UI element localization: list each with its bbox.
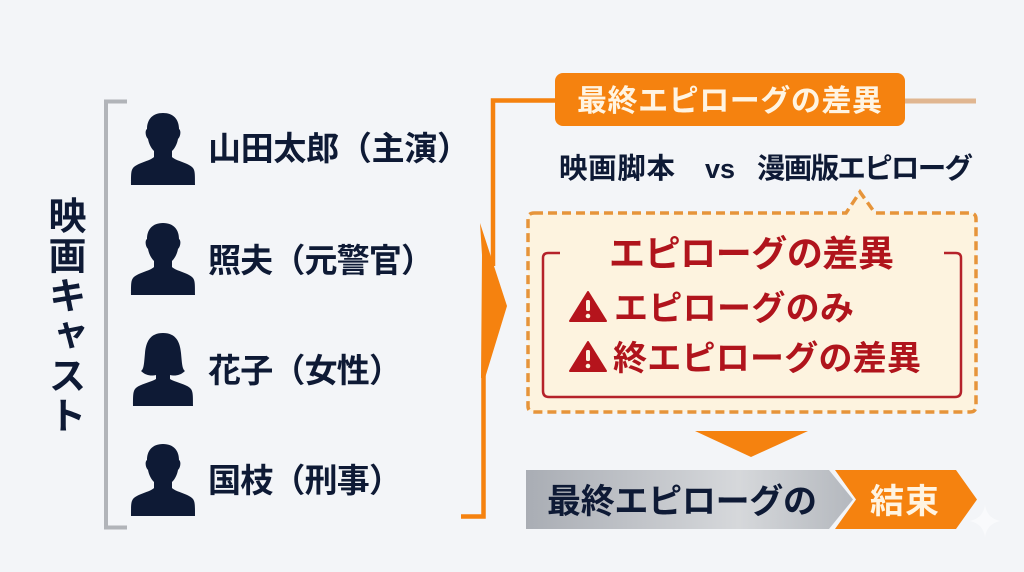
warning row 2: 終エピローグの差異 — [613, 340, 921, 378]
comparison line — [559, 152, 973, 185]
cast member: Hanako: 花子（女性） — [208, 352, 402, 389]
dashed callout panel — [528, 192, 976, 412]
orange arrow segment — [835, 470, 977, 529]
orange connector arrow — [461, 100, 560, 516]
comparison line: 漫画版エピローグ — [757, 152, 973, 185]
comparison line: 映画脚本 — [559, 153, 675, 185]
inner red frame — [543, 253, 961, 397]
cast bracket — [106, 102, 127, 528]
header badge — [555, 73, 905, 126]
cast member: Kunieda — [131, 444, 402, 516]
banner text: 最終エピローグの — [547, 483, 817, 521]
down arrow — [695, 431, 808, 457]
header badge: 最終エピローグの差異 — [577, 85, 882, 118]
cast member: Yamada Taro — [131, 113, 470, 185]
cast member: Yamada Taro: 山田太郎（主演） — [208, 130, 470, 167]
cast member: Teruo — [131, 223, 434, 295]
banner emphasis text: 結束 — [870, 483, 939, 521]
comparison line: vs — [705, 154, 735, 184]
warning row 1: エピローグのみ — [614, 290, 854, 328]
conclusion banner — [526, 470, 977, 529]
vertical heading: movie cast: 映画キャスト — [42, 196, 85, 436]
cast member: Teruo: 照夫（元警官） — [208, 242, 434, 279]
panel: cast list — [131, 113, 470, 516]
cast member: Hanako — [133, 333, 402, 406]
grey arrow segment — [526, 470, 853, 529]
cast member: Kunieda: 国枝（刑事） — [208, 462, 402, 499]
header line right — [900, 98, 976, 104]
callout title: エピローグの差異 — [609, 233, 894, 274]
sparkle watermark — [970, 505, 1000, 537]
